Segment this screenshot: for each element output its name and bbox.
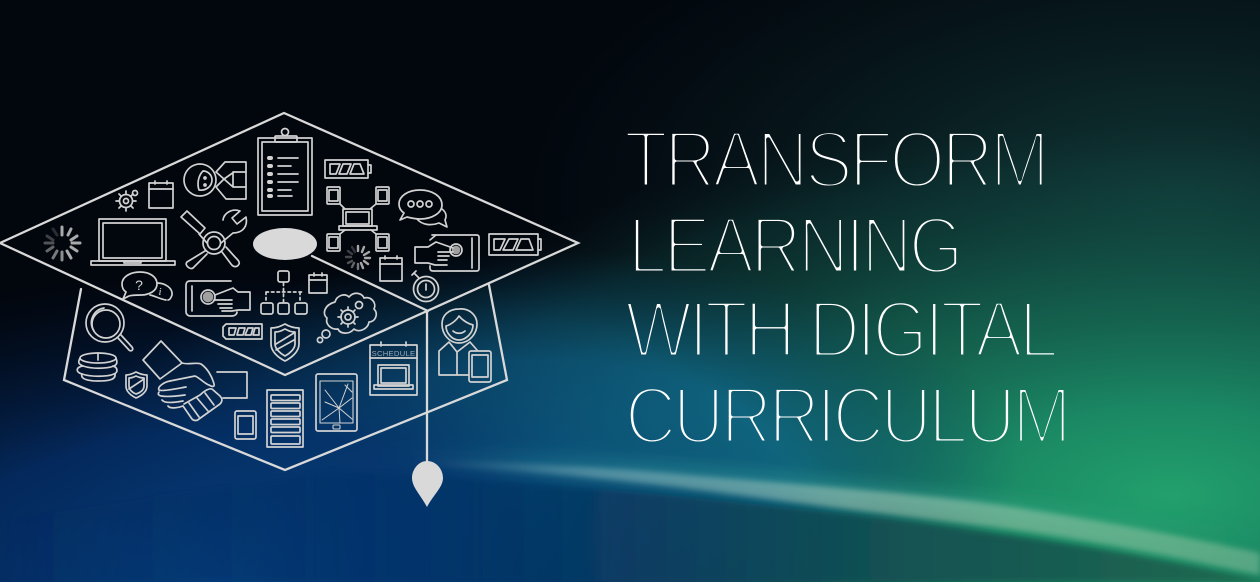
tassel cord and pendant — [412, 311, 443, 507]
icon: battery right — [489, 234, 541, 255]
icon: person with glasses — [184, 162, 246, 199]
title: Transform Learning with Digital Curriculum — [624, 115, 1068, 461]
icon: magnifying glass — [86, 304, 133, 351]
title: Transform Learning with Digital Curriculum: WITH DIGITAL — [625, 285, 1057, 375]
icon: laptop large — [91, 219, 175, 265]
icon: shield small — [126, 372, 147, 398]
icon: coin stack — [77, 353, 117, 381]
icon: small tablet — [235, 411, 256, 439]
icon: chat bubbles with dots — [399, 190, 447, 227]
cap outline: mortarboard and base — [0, 113, 578, 470]
icon: calendar — [149, 181, 173, 208]
icon: question and info speech bubbles: ? — [135, 277, 143, 293]
icon: clipboard checklist — [258, 128, 312, 215]
icon: server rack — [267, 390, 303, 447]
icon: teacher with tablet — [439, 309, 491, 382]
icon: thought cloud with gear — [317, 293, 376, 343]
icon: shield centre — [271, 324, 299, 361]
icon: org chart — [261, 271, 307, 314]
icon: tablet with map — [316, 374, 357, 431]
title: Transform Learning with Digital Curriculum: LEARNING — [628, 201, 960, 291]
icon: loading spinner left — [45, 227, 80, 260]
icon: hand on tablet left — [186, 281, 250, 316]
icon: question and info speech bubbles: i — [158, 286, 162, 298]
icon: schedule laptop board: SCHEDULE — [372, 349, 415, 358]
title: Transform Learning with Digital Curriculum: CURRICULUM — [625, 371, 1068, 461]
icon: battery top — [325, 160, 371, 178]
icon: loading spinner centre — [346, 246, 370, 269]
graduation cap illustration — [0, 113, 578, 507]
icon: stopwatch — [412, 271, 438, 302]
icon: tools wrench and screwdriver — [181, 210, 246, 268]
icon: network of devices around laptop — [327, 187, 389, 251]
icon: handshake — [143, 341, 247, 420]
centre button ellipse — [253, 228, 317, 260]
icon: schedule laptop board — [370, 342, 417, 395]
icon: calendar right — [380, 256, 402, 281]
title: Transform Learning with Digital Curriculum: TRANSFORM — [624, 115, 1046, 205]
icon: gears — [116, 190, 138, 211]
icon: question and info speech bubbles — [122, 272, 172, 300]
icon: small battery — [223, 324, 262, 339]
icon: hand on tablet right — [415, 235, 479, 271]
icon: calendar centre — [309, 273, 327, 293]
